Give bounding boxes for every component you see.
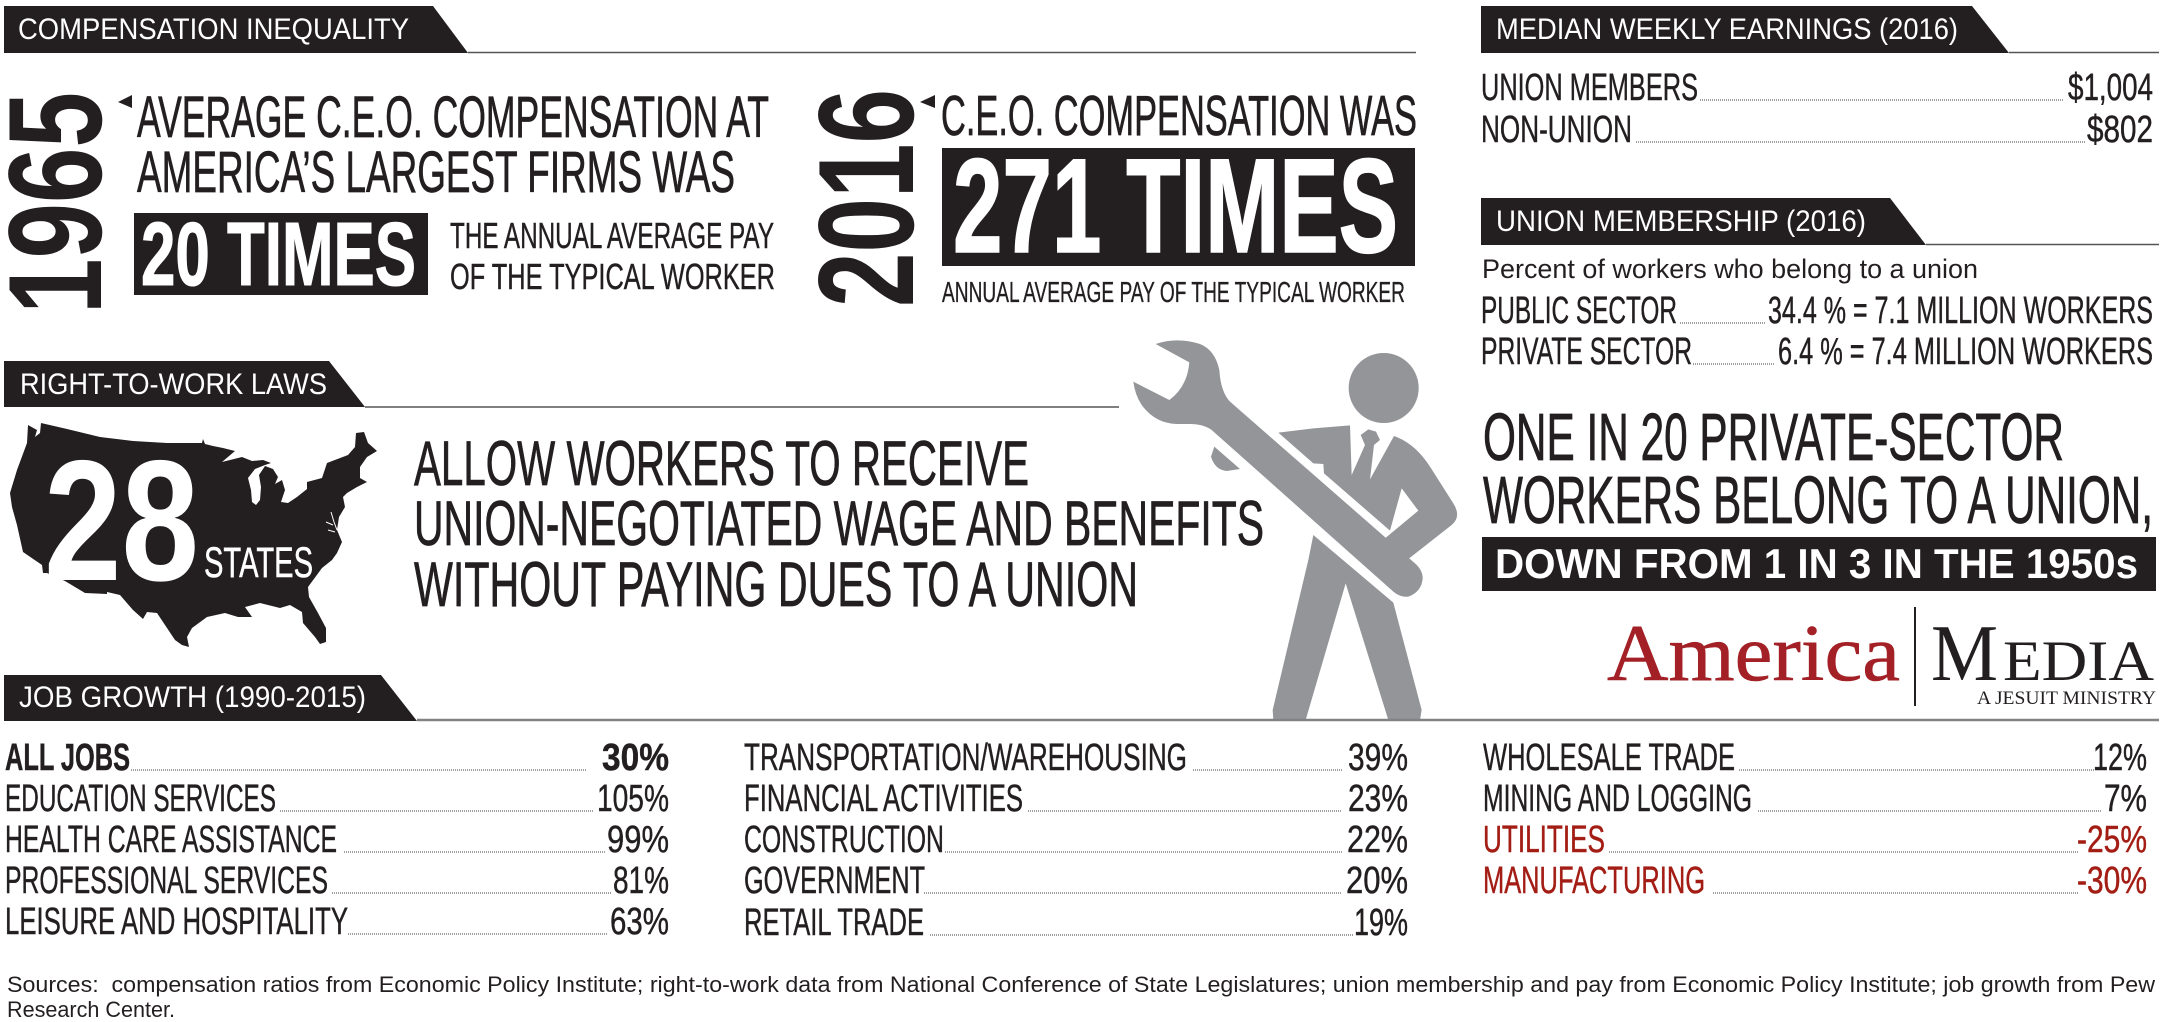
heading: compensation inequality: COMPENSATION INEQUALITY (18, 13, 409, 46)
row: manufacturing: MANUFACTURING (1483, 860, 1705, 902)
logo: America Media: A JESUIT MINISTRY (1977, 688, 2156, 709)
heading: compensation inequality (4, 6, 1416, 53)
text block: annual average pay: OF THE TYPICAL WORKER (450, 256, 775, 297)
text block: right-to-work description: ALLOW WORKERS TO RECEIVE (414, 429, 1029, 499)
row: union members: UNION MEMBERS (1481, 67, 1698, 109)
column: job growth right (1483, 737, 2147, 902)
row: education services: 105% (597, 778, 669, 820)
row: construction: CONSTRUCTION (744, 819, 944, 861)
row: wholesale trade: WHOLESALE TRADE (1483, 737, 1735, 779)
row: utilities (1483, 819, 2147, 861)
row: retail trade (744, 902, 1408, 944)
heading: right-to-work laws: RIGHT-TO-WORK LAWS (20, 368, 327, 401)
logo: America Media (1607, 607, 2156, 709)
row: private sector (1481, 331, 2153, 373)
panel: median weekly earnings (1481, 6, 2159, 151)
row: government: GOVERNMENT (744, 860, 925, 902)
divider (417, 719, 2159, 721)
row: transportation/warehousing: TRANSPORTATION/WAREHOUSING (744, 737, 1187, 779)
panel: union membership (1481, 198, 2159, 591)
sources: Sources: compensation ratios from Economic Policy Institute; right-to-work data from National Conference of State Legislatures; union membership and pay from Economic Policy Institute; job growth from Pew (7, 972, 2155, 997)
head (1349, 353, 1419, 423)
row: education services (5, 778, 669, 820)
row: leisure and hospitality: LEISURE AND HOSPITALITY (5, 901, 348, 943)
row: mining and logging (1483, 778, 2147, 820)
heading: median weekly earnings (1481, 6, 2159, 53)
stat: 28 states: STATES (204, 539, 313, 587)
row: financial activities (744, 778, 1408, 820)
row: government (744, 860, 1408, 902)
row: all jobs: 30% (602, 737, 669, 779)
stat: 28 states: 28 (44, 425, 199, 617)
row: construction: 22% (1347, 819, 1408, 861)
heading: job growth: JOB GROWTH (1990-2015) (19, 681, 366, 714)
text block: right-to-work description: WITHOUT PAYING DUES TO A UNION (414, 550, 1138, 620)
row: professional services: 81% (613, 860, 669, 902)
arrow: 1965 pointer (118, 95, 132, 108)
text block: one in 20 (1483, 400, 2153, 538)
row: public sector: PUBLIC SECTOR (1481, 290, 1677, 332)
row: utilities: UTILITIES (1483, 819, 1605, 861)
row: education services: EDUCATION SERVICES (5, 778, 276, 820)
year label: 2016: 2016 (790, 89, 942, 307)
sources (7, 972, 2155, 1022)
callout: 271 times (942, 132, 1415, 281)
hand (1211, 447, 1240, 471)
row: manufacturing: -30% (2077, 860, 2147, 902)
sources: Research Center. (7, 997, 175, 1022)
torso and arm (1278, 425, 1457, 559)
map: United States silhouette (10, 423, 377, 647)
row: public sector (1481, 290, 2153, 332)
panel: job growth (4, 675, 2159, 944)
row: mining and logging: MINING AND LOGGING (1483, 778, 1752, 820)
heading: union membership (1481, 198, 2159, 245)
logo: America Media: M (1931, 610, 1998, 698)
text block: 1965 statement: AMERICA’S LARGEST FIRMS WAS (137, 140, 735, 205)
text block: 1965 statement (137, 85, 769, 205)
row: utilities: -25% (2077, 819, 2147, 861)
text block: 2016 statement: C.E.O. COMPENSATION WAS (941, 84, 1417, 148)
row: financial activities: FINANCIAL ACTIVITIES (744, 778, 1023, 820)
text block: 1965 statement: AVERAGE C.E.O. COMPENSATION AT (137, 85, 769, 150)
row: government: 20% (1346, 860, 1408, 902)
heading: median weekly earnings: MEDIAN WEEKLY EARNINGS (2016) (1496, 13, 1958, 46)
logo: America Media: EDIA (2003, 630, 2154, 693)
row: retail trade: RETAIL TRADE (744, 902, 924, 944)
panel: compensation inequality (0, 6, 1417, 314)
logo: America Media: America (1607, 610, 1900, 698)
row: professional services: PROFESSIONAL SERVICES (5, 860, 328, 902)
row: mining and logging: 7% (2104, 778, 2147, 820)
row: health care assistance: 99% (607, 819, 669, 861)
row: leisure and hospitality: 63% (610, 901, 669, 943)
column: job growth middle (744, 737, 1408, 944)
row: private sector: PRIVATE SECTOR (1481, 331, 1692, 373)
column: job growth left (5, 737, 669, 943)
callout: down from 1 in 3: DOWN FROM 1 IN 3 IN THE 1950s (1495, 540, 2138, 587)
heading: job growth (4, 675, 417, 721)
row: all jobs (5, 737, 669, 779)
text block: right-to-work description (414, 429, 1264, 620)
callout: 20 times: 20 TIMES (141, 205, 416, 305)
caption: annual average pay: ANNUAL AVERAGE PAY OF THE TYPICAL WORKER (942, 277, 1405, 309)
panel: right-to-work laws (4, 361, 1264, 647)
heading: right-to-work laws (4, 361, 1119, 407)
wrench (1133, 340, 1423, 597)
icon: worker carrying a wrench (1133, 340, 1457, 720)
row: health care assistance: HEALTH CARE ASSISTANCE (5, 819, 337, 861)
row: non-union: NON-UNION (1481, 109, 1632, 151)
text block: right-to-work description: UNION-NEGOTIATED WAGE AND BENEFITS (414, 489, 1264, 559)
row: financial activities: 23% (1348, 778, 1408, 820)
row: retail trade: 19% (1354, 902, 1408, 944)
heading: union membership: UNION MEMBERSHIP (2016) (1496, 205, 1866, 238)
row: wholesale trade (1483, 737, 2147, 779)
row: all jobs: ALL JOBS (5, 737, 130, 779)
text block: annual average pay: THE ANNUAL AVERAGE PAY (450, 215, 774, 256)
legs (1273, 535, 1422, 720)
row: construction (744, 819, 1408, 861)
text block: annual average pay (450, 215, 775, 297)
row: manufacturing (1483, 860, 2147, 902)
row: transportation/warehousing: 39% (1348, 737, 1408, 779)
row: non-union (1481, 109, 2153, 151)
row: union members (1481, 67, 2153, 109)
callout: 271 times: 271 TIMES (953, 132, 1398, 281)
subheading: percent of workers: Percent of workers who belong to a union (1482, 254, 1978, 284)
arrow: 2016 pointer (920, 95, 935, 108)
